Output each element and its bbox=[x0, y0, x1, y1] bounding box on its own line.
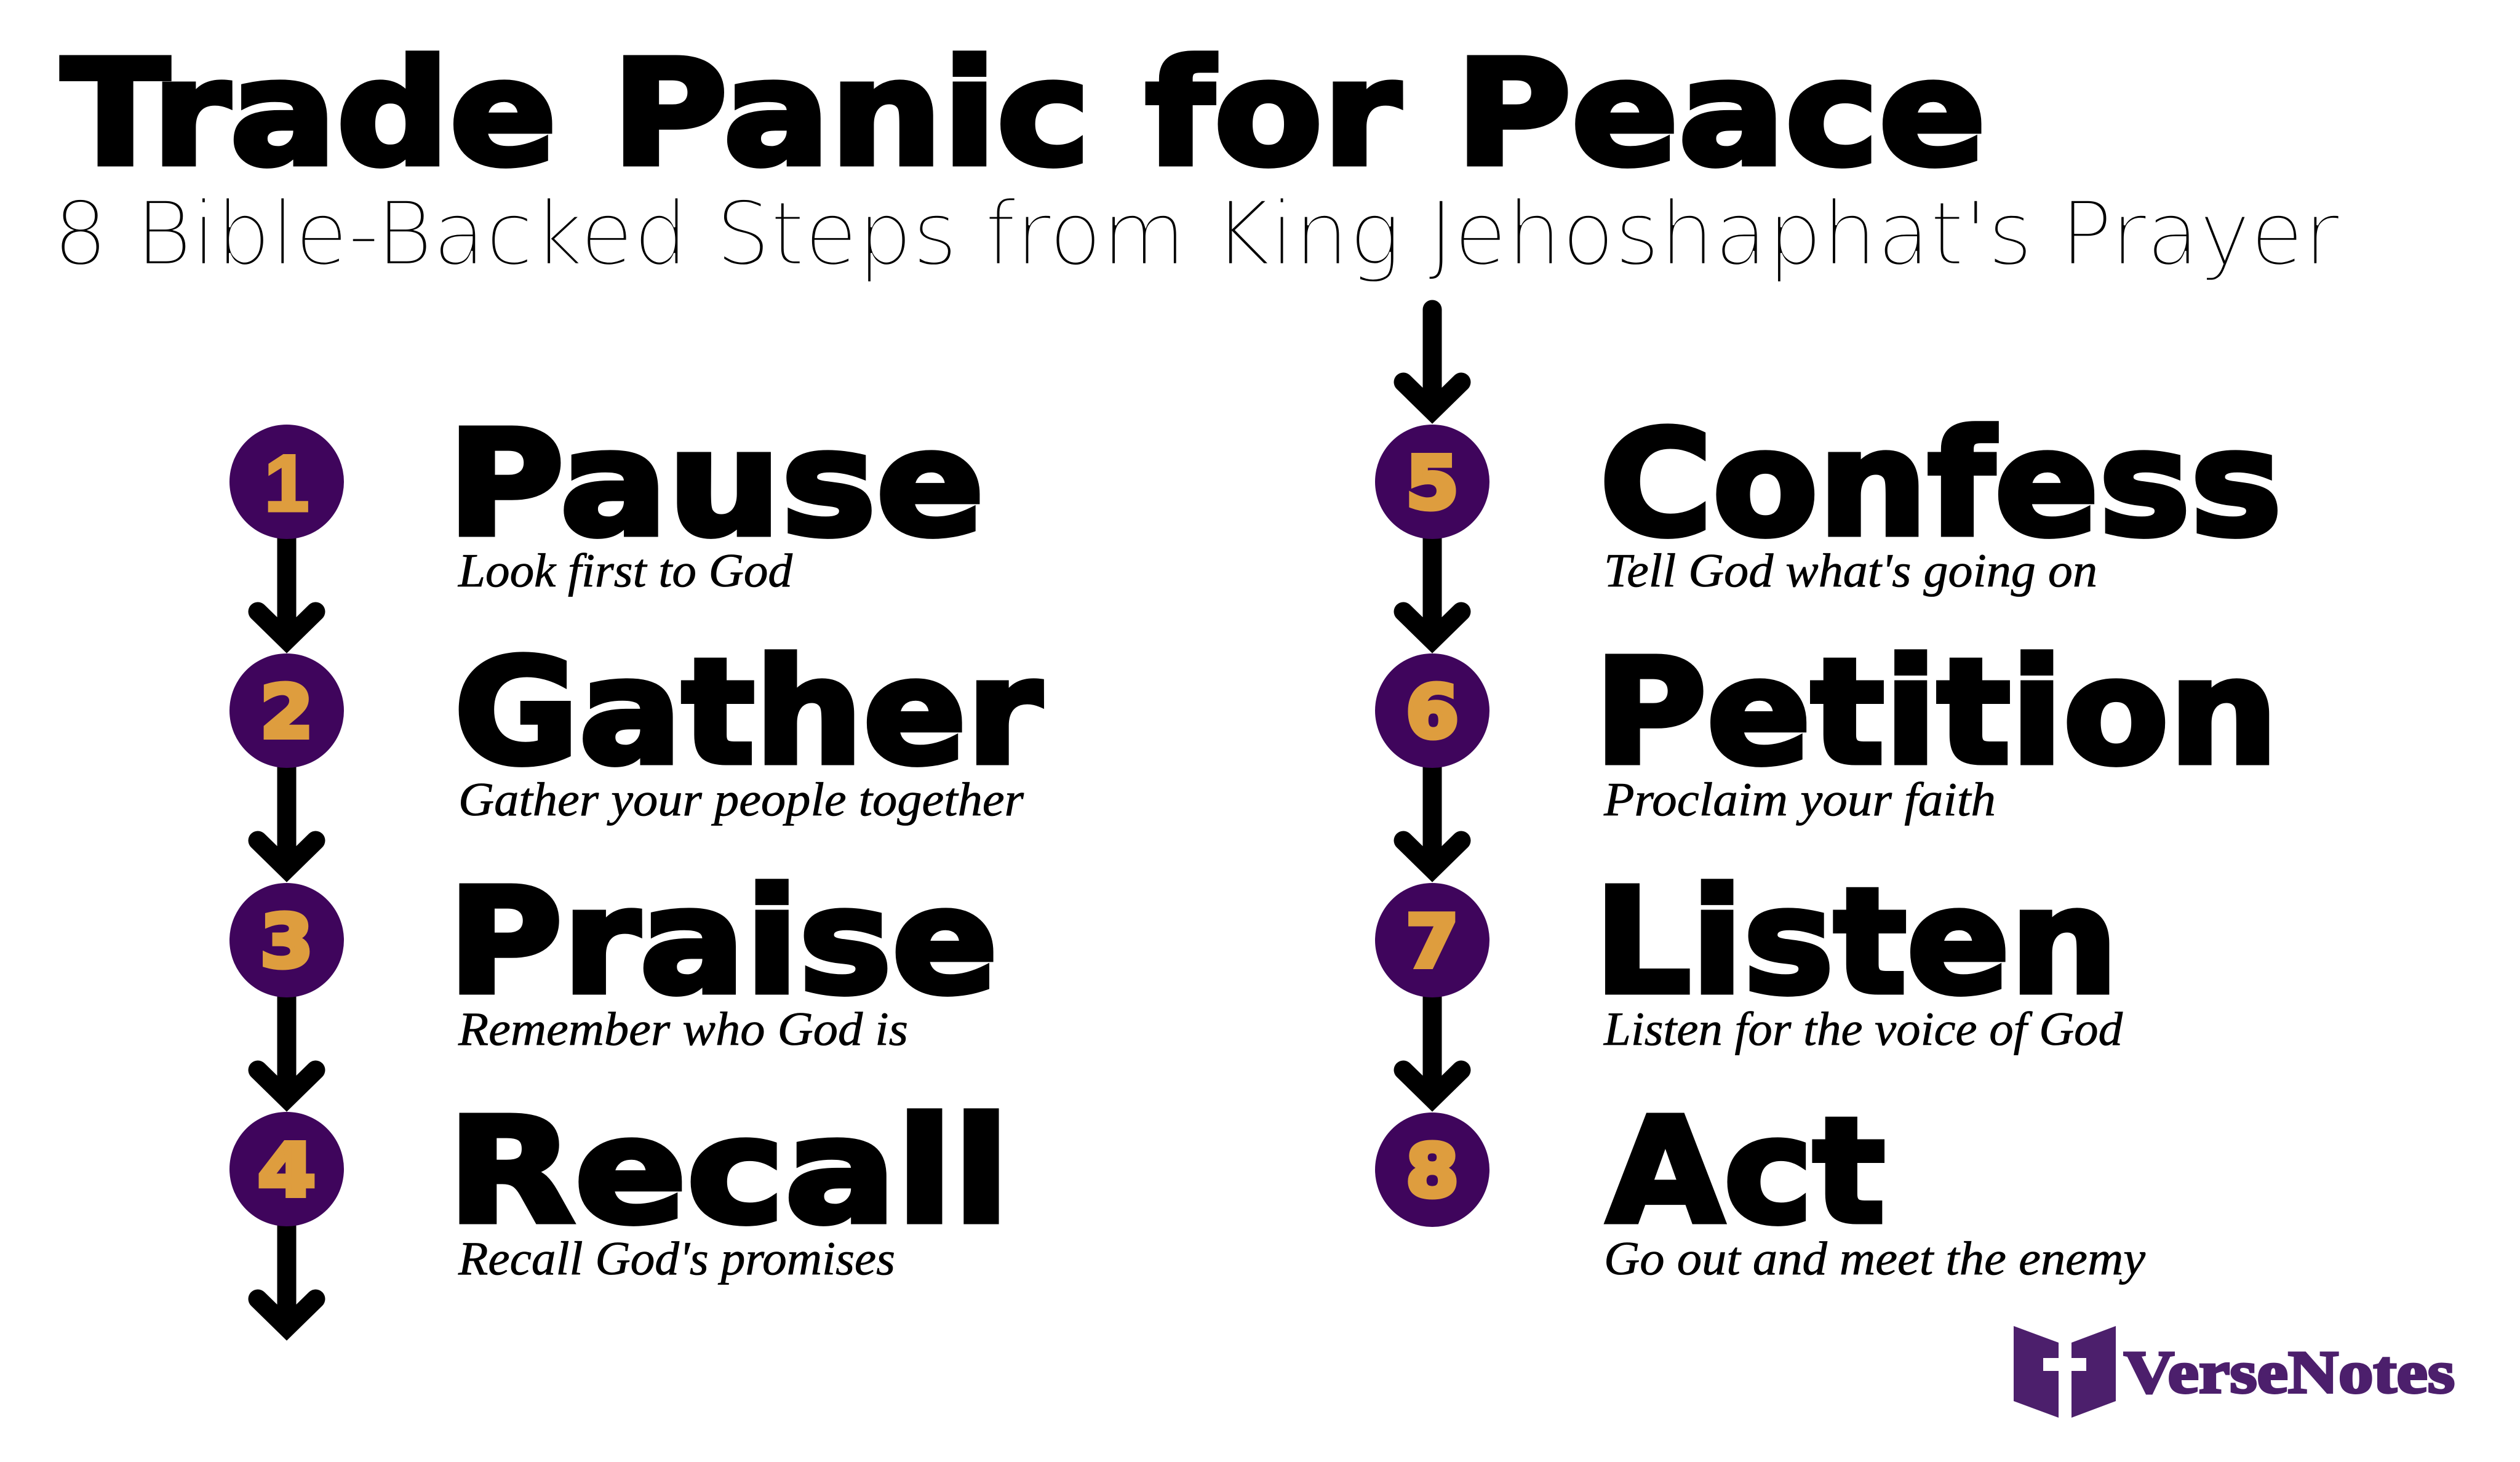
step 7: Listen bbox=[1375, 857, 2123, 1055]
step 1: Pause bbox=[229, 399, 984, 597]
number badge 2: 2 bbox=[260, 669, 313, 754]
heading: Gather: Gather bbox=[454, 628, 1042, 797]
number badge 5: 5 bbox=[1406, 441, 1459, 525]
number badge 1 bbox=[229, 425, 344, 539]
number badge 8 bbox=[1375, 1112, 1489, 1227]
heading: Recall: Recall bbox=[447, 1087, 1010, 1256]
number badge 3: 3 bbox=[260, 899, 313, 984]
heading: Act: Act bbox=[1607, 1087, 1885, 1256]
number badge 6: 6 bbox=[1406, 669, 1459, 754]
subtitle: 8 Bible-Backed Steps from King Jehoshaphat's Prayer bbox=[53, 183, 2340, 285]
heading: Petition: Petition bbox=[1594, 628, 2278, 797]
logo: VerseNotes bbox=[2014, 1326, 2455, 1418]
tagline: Gather your people together: Gather your people together bbox=[458, 773, 1024, 826]
arrow: step 2 to 3 bbox=[258, 711, 316, 869]
heading: Pause: Pause bbox=[447, 399, 984, 569]
arrow: after step 4 bbox=[258, 1169, 316, 1327]
tagline: Listen for the voice of God: Listen for the voice of God bbox=[1603, 1002, 2123, 1055]
arrow: step 6 to 7 bbox=[1403, 711, 1461, 869]
step 4: Recall bbox=[229, 1087, 1010, 1285]
step 8: Act bbox=[1375, 1087, 2146, 1285]
title: Trade Panic for Peace bbox=[62, 29, 1986, 198]
arrow: step 5 to 6 bbox=[1403, 482, 1461, 640]
icon: open book with cross bbox=[2014, 1326, 2116, 1418]
arrow: into step 5 bbox=[1403, 310, 1461, 410]
arrow: step 7 to 8 bbox=[1403, 940, 1461, 1098]
tagline: Proclaim your faith: Proclaim your faith bbox=[1603, 773, 1996, 826]
heading: Confess: Confess bbox=[1600, 399, 2282, 569]
wordmark: VerseNotes bbox=[2124, 1339, 2455, 1406]
tagline: Remember who God is: Remember who God is bbox=[458, 1002, 908, 1055]
arrow: step 3 to 4 bbox=[258, 940, 316, 1098]
arrow: step 1 to 2 bbox=[258, 482, 316, 640]
tagline: Go out and meet the enemy: Go out and meet the enemy bbox=[1604, 1232, 2146, 1285]
heading: Praise: Praise bbox=[448, 857, 998, 1026]
number badge 7: 7 bbox=[1406, 899, 1459, 984]
number badge 4 bbox=[229, 1112, 344, 1226]
step 5: Confess bbox=[1375, 399, 2282, 597]
tagline: Look first to God: Look first to God bbox=[458, 544, 792, 597]
number badge 3 bbox=[229, 883, 344, 997]
number badge 2 bbox=[229, 653, 344, 768]
tagline: Recall God's promises: Recall God's promises bbox=[458, 1232, 895, 1285]
number badge 5 bbox=[1375, 425, 1489, 539]
step 3: Praise bbox=[229, 857, 998, 1055]
number badge 1: 1 bbox=[265, 438, 309, 528]
step 2: Gather bbox=[229, 628, 1042, 826]
number badge 8: 8 bbox=[1406, 1128, 1459, 1213]
heading: Listen: Listen bbox=[1594, 857, 2118, 1026]
number badge 4: 4 bbox=[258, 1128, 316, 1213]
number badge 7 bbox=[1375, 883, 1489, 997]
step 6: Petition bbox=[1375, 628, 2278, 826]
number badge 6 bbox=[1375, 653, 1489, 768]
tagline: Tell God what's going on: Tell God what's going on bbox=[1604, 544, 2097, 597]
